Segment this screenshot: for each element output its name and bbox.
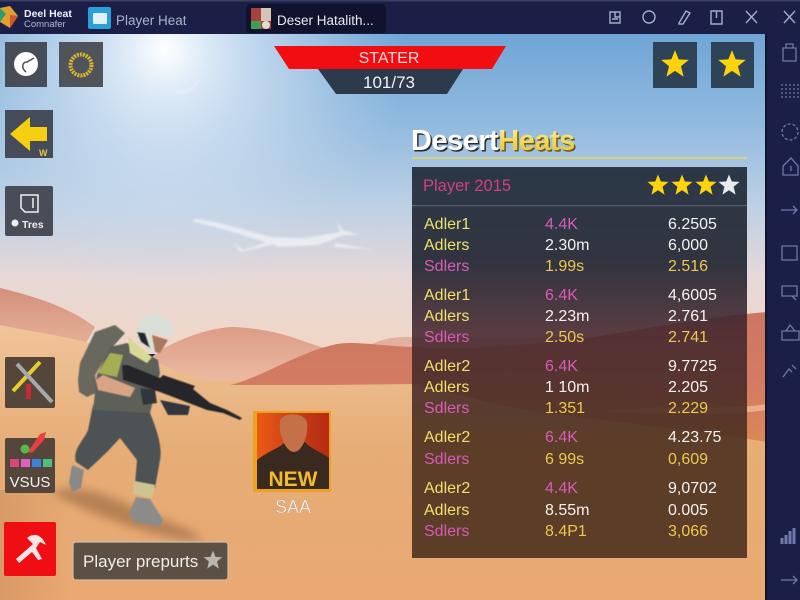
sidebar icon: gear xyxy=(782,124,798,140)
tab: active xyxy=(246,4,386,33)
stats rows: 0.005 xyxy=(668,502,708,519)
sidebar icon: link xyxy=(783,365,796,377)
top status banner: 101/73 xyxy=(363,73,415,92)
button: red hammer xyxy=(4,522,56,576)
stats rows: 1 10m xyxy=(545,379,589,396)
stats rows: 9.7725 xyxy=(668,358,717,375)
app logo xyxy=(0,6,18,28)
tab: active: Deser Hatalith... xyxy=(277,13,374,28)
stats rows: 2.50s xyxy=(545,329,584,346)
arm xyxy=(96,375,135,397)
scarf xyxy=(128,337,152,363)
app name: Deel Heat xyxy=(24,8,72,20)
button: yellow arrow: W xyxy=(39,148,48,158)
new character card: NEW xyxy=(268,468,318,491)
stats rows: 4.4K xyxy=(545,480,578,497)
button: yellow arrow xyxy=(5,110,53,158)
stats rows: 2.229 xyxy=(668,400,708,417)
panel header: Player 2015 xyxy=(423,177,511,195)
sidebar icon: arrow xyxy=(781,206,797,214)
stats rows: 6.4K xyxy=(545,287,578,304)
stats rows: Adlers xyxy=(424,308,469,325)
button: vsus: VSUS xyxy=(10,474,50,491)
stats rows: Adler2 xyxy=(424,358,470,375)
game title xyxy=(411,125,747,159)
stats rows: 8.4P1 xyxy=(545,523,587,540)
face xyxy=(152,335,168,353)
sidebar icon: home xyxy=(783,158,798,175)
stats rows: 6 99s xyxy=(545,451,584,468)
stats rows: Sdlers xyxy=(424,258,469,275)
sun glint xyxy=(175,72,201,94)
backpack xyxy=(78,325,125,397)
stats rows: Sdlers xyxy=(424,400,469,417)
stats rows: Adler1 xyxy=(424,216,470,233)
stats rows: 4.4K xyxy=(545,216,578,233)
stats rows: Adler2 xyxy=(424,480,470,497)
stats rows: Adlers xyxy=(424,502,469,519)
sidebar icon: kit xyxy=(782,325,799,340)
stats rows: 2.30m xyxy=(545,237,589,254)
button: tools xyxy=(5,357,55,408)
game title: DesertHeats xyxy=(412,126,576,158)
tab: player heat xyxy=(88,7,187,29)
app name xyxy=(24,8,72,30)
stats rows: 2.516 xyxy=(668,258,708,275)
rifle xyxy=(122,365,242,420)
stats rows: 2.23m xyxy=(545,308,589,325)
trouser cuff xyxy=(133,481,155,498)
top window bar xyxy=(0,0,800,34)
stats rows xyxy=(424,216,721,540)
sidebar icon: grid xyxy=(781,85,799,97)
legs xyxy=(75,405,161,488)
window controls xyxy=(610,11,795,24)
stats rows: 1.99s xyxy=(545,258,584,275)
sidebar icon: tablet xyxy=(782,246,797,260)
gloves xyxy=(140,388,190,415)
stats rows: 8.55m xyxy=(545,502,589,519)
stats rows: 6,000 xyxy=(668,237,708,254)
stats rows: 4,6005 xyxy=(668,287,717,304)
stats rows: 6.4K xyxy=(545,358,578,375)
stats rows: Sdlers xyxy=(424,329,469,346)
sleeve xyxy=(98,353,123,377)
top status banner xyxy=(274,46,506,94)
sidebar icon: case xyxy=(783,44,796,61)
stats rows: Adler2 xyxy=(424,429,470,446)
button: trees xyxy=(5,186,53,236)
player prompt button: Player prepurts xyxy=(83,552,198,571)
sidebar icon: signal xyxy=(782,528,794,544)
app name: Comnafer xyxy=(24,19,66,30)
button: trees: Tres xyxy=(22,219,44,231)
stats rows: Adlers xyxy=(424,379,469,396)
sidebar icon: search xyxy=(782,286,797,300)
stats rows: 3,066 xyxy=(668,523,708,540)
top status banner: STATER xyxy=(359,50,419,67)
button: vsus xyxy=(5,432,55,493)
stats rows: Adler1 xyxy=(424,287,470,304)
button: ring xyxy=(59,42,103,87)
stats rows: 2.205 xyxy=(668,379,708,396)
stats panel xyxy=(412,167,747,558)
stats rows: 2.741 xyxy=(668,329,708,346)
helmet xyxy=(136,313,173,355)
tab: player heat: Player Heat xyxy=(116,13,187,28)
left tool buttons xyxy=(4,42,103,576)
right sidebar xyxy=(765,34,800,600)
new character card xyxy=(253,411,331,492)
ground shadow xyxy=(50,488,201,542)
stats rows: Adlers xyxy=(424,237,469,254)
stats rows: 4.23.75 xyxy=(668,429,721,446)
game title: DesertHeats xyxy=(411,125,575,157)
stats rows: Sdlers xyxy=(424,523,469,540)
star button 1 xyxy=(653,42,697,88)
torso xyxy=(93,343,160,413)
helmet band xyxy=(137,332,150,348)
soldier xyxy=(50,313,242,542)
rating stars xyxy=(647,174,740,195)
stats rows: 0,609 xyxy=(668,451,708,468)
stats rows: 6.4K xyxy=(545,429,578,446)
button: clock xyxy=(5,42,47,87)
stats rows: 6.2505 xyxy=(668,216,717,233)
stats rows: 2.761 xyxy=(668,308,708,325)
rear boot xyxy=(69,465,84,492)
stats rows: 9,0702 xyxy=(668,480,717,497)
stats rows: Sdlers xyxy=(424,451,469,468)
star button 2 xyxy=(711,42,754,88)
player prompt button xyxy=(73,542,228,580)
character label: SAA xyxy=(275,497,311,517)
sidebar icon: arrow xyxy=(781,576,797,584)
airplane xyxy=(194,219,375,252)
front boot xyxy=(129,497,163,527)
stats rows: 1.351 xyxy=(545,400,585,417)
